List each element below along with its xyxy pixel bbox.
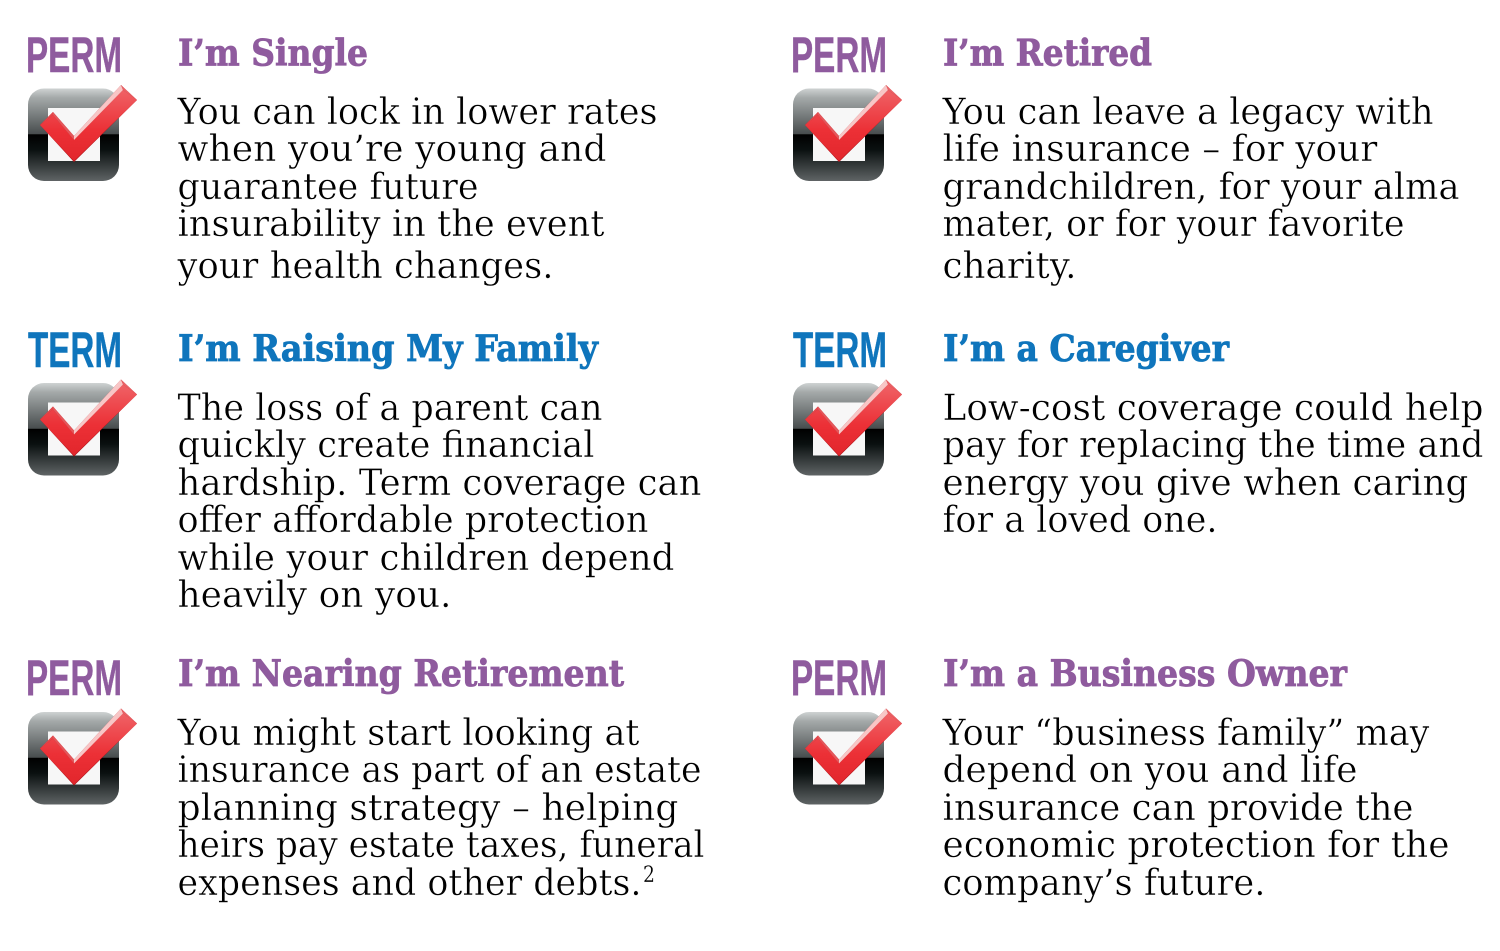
- text block: raising family: offer affordable protection: [178, 500, 648, 541]
- icon: red checkmark in box: [28, 85, 137, 181]
- heading: I'm a Caregiver: I’m a Caregiver: [943, 328, 1230, 370]
- text block: retired: charity.: [942, 246, 1076, 287]
- text block: business owner: depend on you and life: [942, 750, 1358, 791]
- text block: single: your health changes.: [177, 246, 554, 287]
- text block: nearing retirement: heirs pay estate taxes, funeral: [178, 825, 704, 866]
- panel: I'm Single: [26, 27, 658, 287]
- text block: raising family: [178, 388, 702, 616]
- panel: I'm Raising My Family: [28, 322, 702, 616]
- text block: raising family: The loss of a parent can: [178, 388, 602, 429]
- text block: caregiver: pay for replacing the time and: [942, 425, 1484, 466]
- text block: single: [177, 92, 658, 287]
- text block: caregiver: for a loved one.: [942, 500, 1218, 541]
- text block: raising family: heavily on you.: [178, 575, 452, 616]
- text block: raising family: hardship. Term coverage can: [178, 463, 702, 504]
- text block: single: insurability in the event: [178, 204, 605, 245]
- heading: I'm Nearing Retirement: I’m Nearing Retirement: [178, 653, 624, 695]
- text block: business owner: Your “business family” may: [942, 713, 1430, 754]
- text block: nearing retirement: [177, 713, 705, 904]
- heading: I'm Raising My Family: I’m Raising My Family: [178, 328, 599, 370]
- text block: raising family: while your children depend: [178, 538, 674, 579]
- label: PERM: PERM: [791, 27, 887, 83]
- icon: red checkmark in box: [793, 85, 902, 181]
- label: TERM: TERM: [28, 322, 122, 378]
- icon: red checkmark in box: [793, 708, 902, 804]
- label: PERM: PERM: [791, 650, 887, 706]
- panel: I'm Nearing Retirement: [26, 650, 704, 904]
- text block: retired: life insurance – for your: [942, 129, 1378, 170]
- panel: I'm Retired: [791, 27, 1460, 287]
- text block: caregiver: [942, 388, 1484, 541]
- text block: retired: mater, or for your favorite: [942, 204, 1404, 245]
- text block: caregiver: energy you give when caring: [942, 463, 1468, 504]
- text block: caregiver: Low-cost coverage could help: [942, 388, 1484, 429]
- icon: red checkmark in box: [28, 380, 137, 476]
- text block: nearing retirement: insurance as part of an estate: [178, 750, 702, 791]
- text block: nearing retirement: planning strategy – helping: [178, 788, 678, 829]
- text block: business owner: [942, 713, 1450, 904]
- text block: nearing retirement: 2: [643, 863, 655, 888]
- label: PERM: PERM: [26, 27, 122, 83]
- text block: retired: [942, 92, 1460, 287]
- heading: I'm Retired: I’m Retired: [943, 32, 1152, 74]
- text block: business owner: company’s future.: [942, 863, 1266, 904]
- label: PERM: PERM: [26, 650, 122, 706]
- text block: single: when you’re young and: [178, 129, 606, 170]
- text block: nearing retirement: expenses and other debts.: [178, 863, 642, 904]
- text block: raising family: quickly create financial: [178, 425, 594, 466]
- heading: I'm a Business Owner: I’m a Business Owner: [943, 653, 1348, 695]
- icon: red checkmark in box: [793, 380, 902, 476]
- heading: I'm Single: I’m Single: [178, 32, 368, 74]
- label: TERM: TERM: [793, 322, 887, 378]
- text block: business owner: insurance can provide the: [942, 788, 1414, 829]
- text block: retired: grandchildren, for your alma: [942, 167, 1460, 208]
- panel: I'm a Business Owner: [791, 650, 1450, 904]
- text block: retired: You can leave a legacy with: [942, 92, 1434, 133]
- text block: single: guarantee future: [178, 167, 478, 208]
- text block: business owner: economic protection for the: [942, 825, 1450, 866]
- icon: red checkmark in box: [28, 708, 137, 804]
- text block: single: You can lock in lower rates: [177, 92, 658, 133]
- text block: nearing retirement: You might start looking at: [177, 713, 640, 754]
- panel: I'm a Caregiver: [793, 322, 1484, 541]
